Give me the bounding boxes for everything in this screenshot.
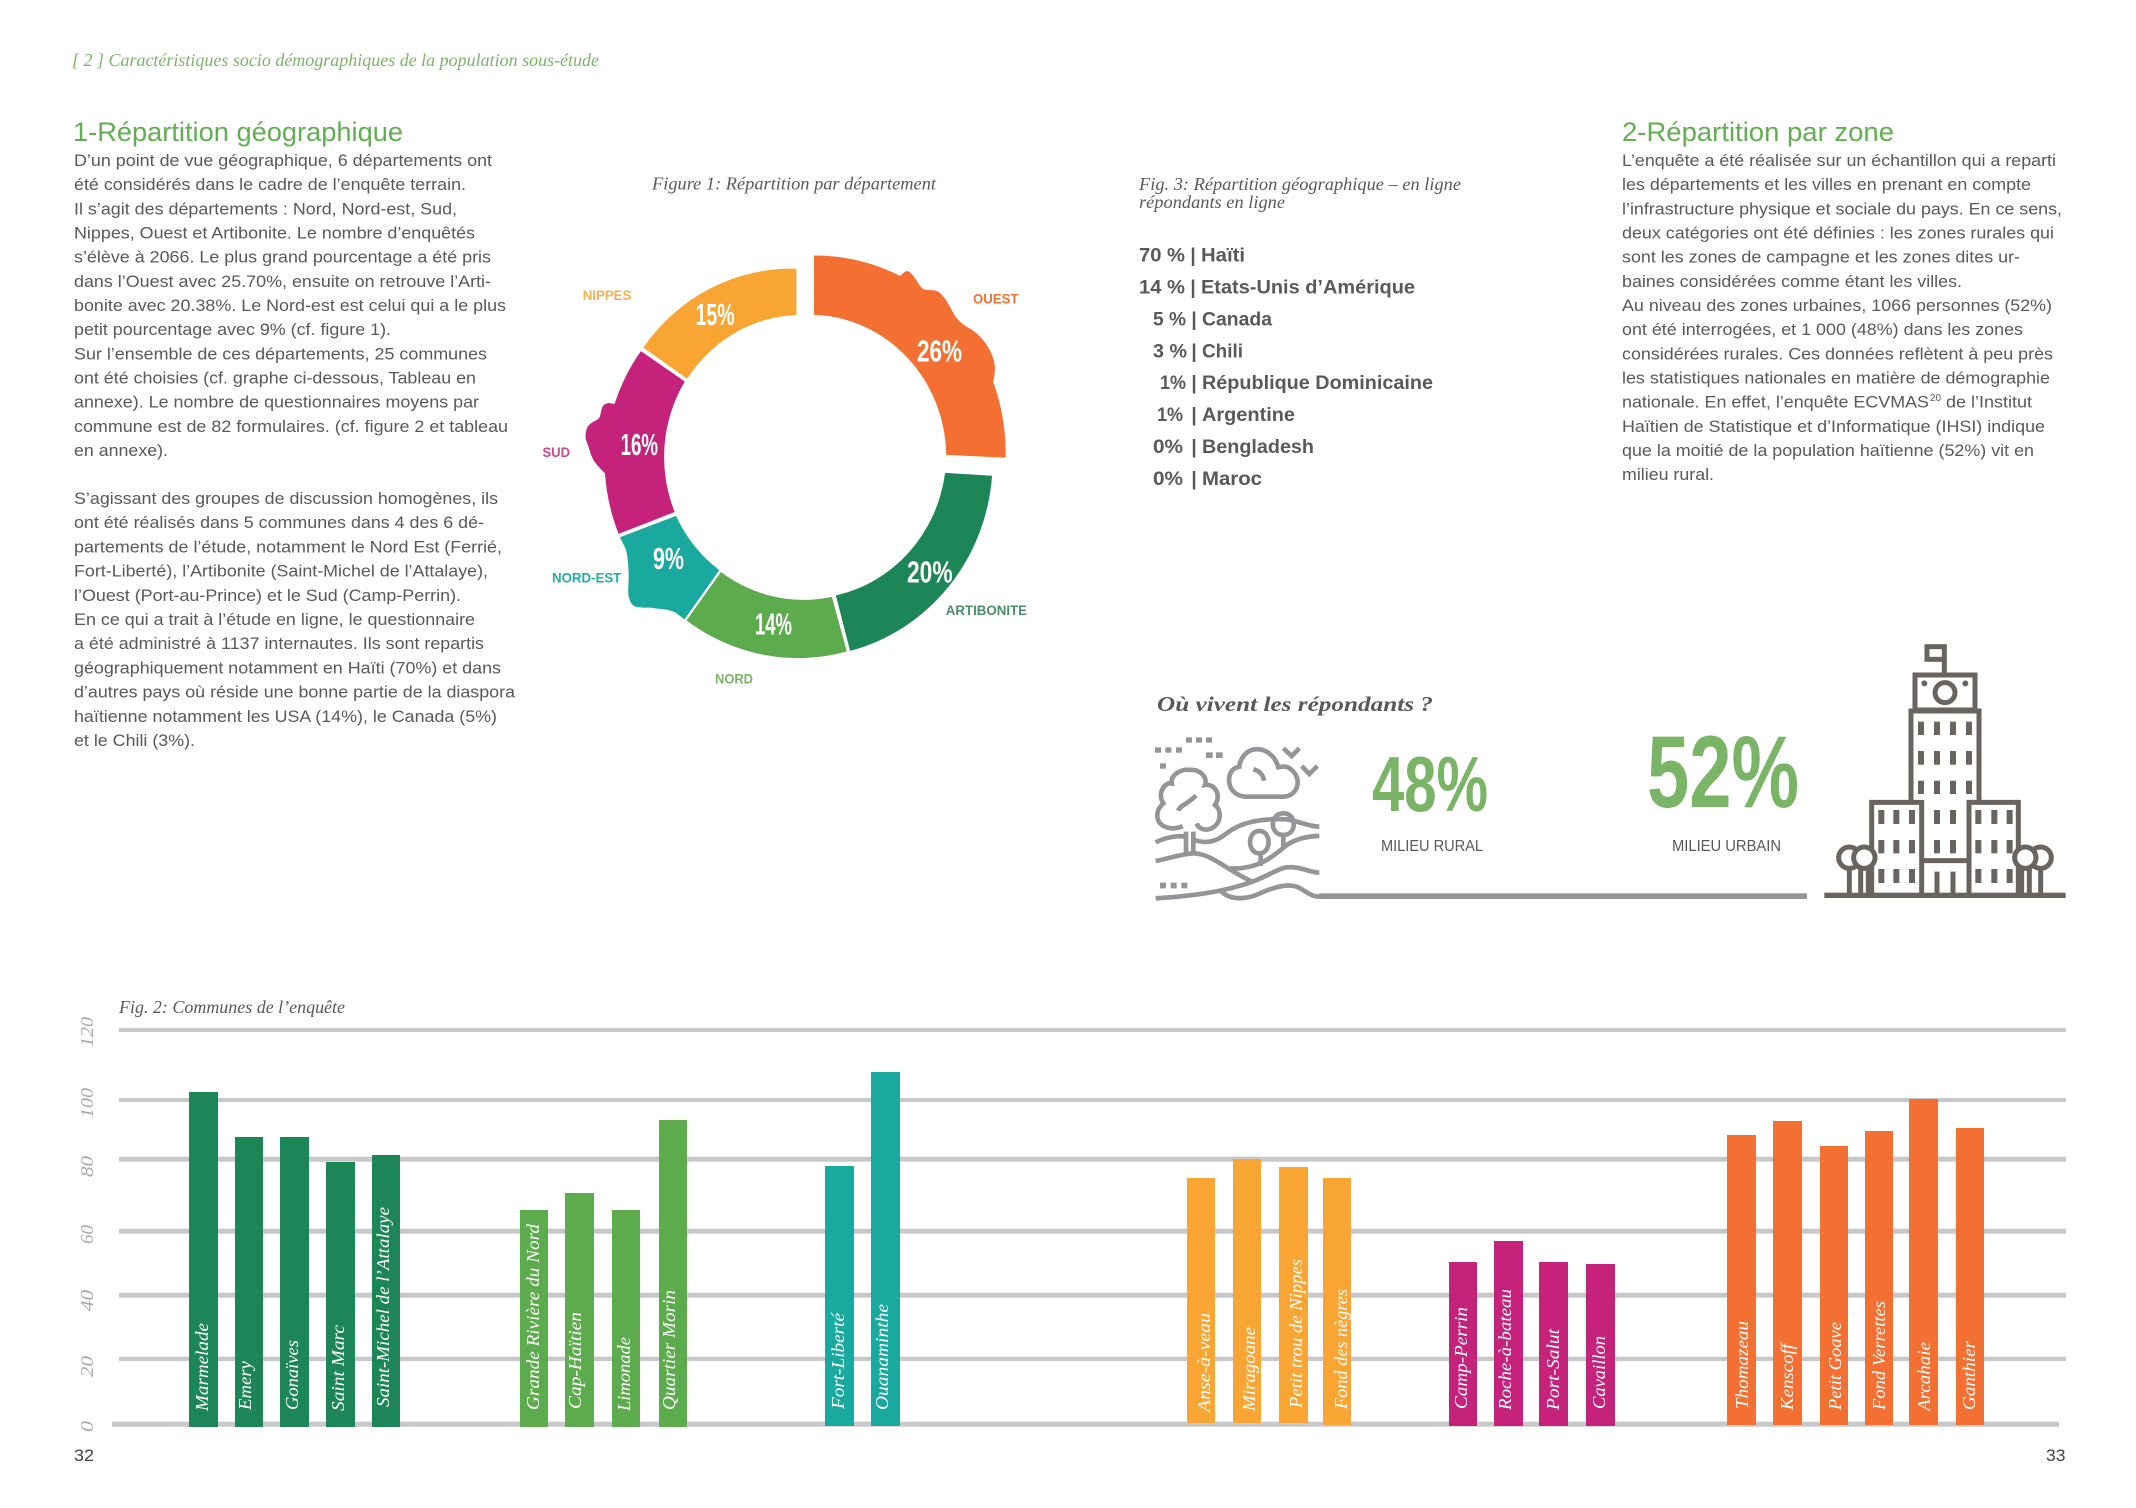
row: Chili: Chili	[1202, 342, 1243, 363]
y axis grid lines and values: 80	[77, 1156, 97, 1177]
y axis grid lines and values: 40	[77, 1290, 97, 1311]
bar: Thomazeau: Thomazeau	[1732, 1321, 1752, 1409]
text block: répartition géographique, second paragraph: et le Chili (3%).	[74, 731, 195, 750]
y axis grid lines and values: 20	[77, 1356, 97, 1377]
text block: répartition géographique, first paragraph: dans l’Ouest avec 25.70%, ensuite on retrouve l’Arti-	[74, 272, 491, 291]
bar: Gonaïves: Gonaïves	[282, 1340, 302, 1410]
bar: Quartier Morin: Quartier Morin	[659, 1290, 679, 1410]
bar: Marmelade	[189, 1092, 218, 1427]
icon: rural landscape	[1155, 737, 1319, 898]
bar: Cap-Haïtien	[565, 1193, 594, 1427]
text block: répartition géographique, first paragraph: annexe). Le nombre de questionnaires moyens par	[74, 393, 480, 412]
bar: Emery: Emery	[235, 1361, 255, 1411]
slice: Nippes 15%	[643, 269, 796, 379]
text block: répartition géographique, first paragraph: s’élève à 2066. Le plus grand pourcentage a été pris	[74, 248, 491, 267]
bar: Emery	[235, 1137, 263, 1427]
row: Haïti: |	[1190, 246, 1196, 267]
bar: Gonaïves	[280, 1137, 309, 1427]
group: Nord bars	[520, 1120, 687, 1427]
bar: Petit Goave: Petit Goave	[1825, 1322, 1845, 1411]
row: Etats-Unis: Etats-Unis d’Amérique	[1201, 278, 1415, 299]
bar: Limonade	[612, 1210, 640, 1427]
bar: Saint-Michel de l'Attalaye	[372, 1155, 400, 1427]
bar: Ganthier: Ganthier	[1959, 1340, 1979, 1410]
text block: répartition géographique, second paragraph: S’agissant des groupes de discussion homogènes, ils	[74, 489, 498, 508]
text block: répartition par zone: nationale. En effet, l’enquête ECVMAS	[1622, 393, 1929, 412]
bar: Fort-Liberté: Fort-Liberté	[828, 1312, 848, 1410]
y axis grid lines and values: 0	[77, 1421, 97, 1432]
label: Nippes: NIPPES	[583, 288, 631, 303]
bar: Petit Goave	[1820, 1146, 1848, 1425]
value: 15%: 15%	[696, 299, 735, 332]
text block: répartition géographique, first paragraph: Sur l’ensemble de ces départements, 25 communes	[74, 344, 487, 363]
bar: Ouanaminthe	[871, 1072, 900, 1426]
label: Sud: SUD	[542, 445, 570, 460]
row: République Dominicaine: 1%	[1160, 373, 1186, 394]
row: Etats-Unis: |	[1190, 278, 1196, 299]
bar: Fond des nègres: Fond des nègres	[1331, 1289, 1351, 1410]
page number 33: 33	[2046, 1446, 2066, 1465]
row: Canada	[1153, 310, 1272, 331]
bar: Saint-Michel de l'Attalaye: Saint-Michel de l’Attalaye	[373, 1207, 393, 1407]
text block: répartition par zone: baines considérées comme étant les villes.	[1622, 272, 1962, 291]
text block: répartition par zone: les statistiques nationales en matière de démographie	[1622, 368, 2050, 388]
row: République Dominicaine: |	[1191, 373, 1197, 394]
bar: Anse-à-veau: Anse-à-veau	[1194, 1313, 1214, 1413]
row: Argentine: 1%	[1157, 405, 1183, 426]
text block: répartition géographique, first paragraph: D’un point de vue géographique, 6 départements ont	[74, 151, 492, 170]
text block: répartition géographique, second paragraph: haïtienne notamment les USA (14%), le Canada (5%)	[74, 707, 497, 726]
bar: Petit trou de Nippes: Petit trou de Nippes	[1286, 1259, 1306, 1409]
subheading: où vivent les répondants: Où vivent les répondants ?	[1157, 692, 1433, 716]
bar: Cavaillon: Cavaillon	[1589, 1336, 1609, 1409]
group: Nord-Est bars	[825, 1072, 900, 1426]
group: Sud bars	[1449, 1241, 1615, 1426]
bar: Port-Salut	[1539, 1262, 1568, 1426]
stat: 48% milieu rural: 48%	[1372, 740, 1488, 828]
text block: répartition par zone: l’infrastructure physique et sociale du pays. En ce sens,	[1622, 199, 2062, 218]
text block: répartition géographique, first paragraph: été considérés dans le cadre de l’enquête terrain.	[74, 175, 466, 194]
bar: Fond Verrettes	[1865, 1131, 1893, 1425]
figure 3 title	[1138, 174, 1461, 212]
text block: répartition géographique, first paragraph: ont été choisies (cf. graphe ci-dessous, Tableau en	[74, 368, 476, 388]
text block: répartition par zone: ont été interrogées, et 1 000 (48%) dans les zones	[1622, 320, 2023, 339]
group: Artibonite bars	[189, 1092, 400, 1427]
bar: Camp-Perrin	[1449, 1262, 1477, 1426]
group: Ouest bars	[1727, 1099, 1984, 1425]
text block: répartition géographique, second paragraph: l’Ouest (Port-au-Prince) et le Sud (Camp-Perrin).	[74, 586, 461, 605]
text block: répartition par zone: milieu rural.	[1622, 465, 1714, 484]
bar: Quartier Morin	[659, 1120, 687, 1427]
bar chart: communes de l'enquête	[77, 1017, 2066, 1432]
label: Artibonite: ARTIBONITE	[946, 603, 1027, 618]
text block: répartition géographique, first paragraph: Il s’agit des départements : Nord, Nord-est, Sud,	[74, 199, 457, 218]
list: répartition géographique en ligne	[1139, 246, 1433, 490]
row: Haïti	[1139, 246, 1245, 267]
text block: répartition par zone: de l’Institut	[1946, 393, 2032, 412]
stat: 48% milieu rural: MILIEU RURAL	[1381, 838, 1483, 855]
text block: répartition par zone: les départements et les villes en prenant en compte	[1622, 175, 2031, 194]
text block: répartition géographique, first paragraph: Nippes, Ouest et Artibonite. Le nombre d’enquêtés	[74, 224, 475, 242]
row: Maroc: 0%	[1153, 469, 1183, 490]
text block: répartition géographique, second paragraph	[74, 489, 516, 750]
page section title: [ 2 ] Caractéristiques socio démographiques de la population sous-étude	[72, 50, 599, 70]
row: Etats-Unis: 14 %	[1139, 278, 1185, 299]
row: Bengladesh: |	[1191, 437, 1197, 458]
text block: répartition par zone	[1622, 151, 2062, 484]
row: Argentine: |	[1191, 405, 1197, 426]
text block: répartition par zone: deux catégories ont été définies : les zones rurales qui	[1622, 224, 2054, 242]
stat: 52% milieu urbain	[1647, 715, 1799, 855]
bar: Thomazeau	[1727, 1135, 1756, 1425]
text block: répartition géographique, first paragraph: commune est de 82 formulaires. (cf. figure 2 et tableau	[74, 417, 508, 436]
value: 16%: 16%	[621, 428, 658, 462]
row: Bengladesh: Bengladesh	[1202, 437, 1314, 458]
row: Chili	[1153, 342, 1243, 363]
text block: répartition par zone: 20	[1930, 393, 1941, 404]
text block: répartition géographique, second paragraph: d’autres pays où réside une bonne partie de la diaspora	[74, 683, 516, 702]
bar: Ouanaminthe: Ouanaminthe	[872, 1304, 892, 1410]
row: Haïti: 70 %	[1139, 246, 1185, 267]
donut chart: répartition par département	[542, 256, 1027, 686]
row: Chili: |	[1191, 342, 1197, 363]
row: Argentine: Argentine	[1202, 405, 1295, 426]
stat: 52% milieu urbain: MILIEU URBAIN	[1672, 838, 1781, 855]
row: Canada: 5 %	[1153, 310, 1186, 331]
bar: Fond des nègres	[1323, 1178, 1351, 1425]
y axis grid lines and values: 60	[77, 1225, 97, 1244]
figure 3 title: répondants en ligne	[1139, 192, 1285, 212]
heading: 1-Répartition géographique: 1-Répartition géographique	[73, 117, 403, 147]
value: 14%: 14%	[755, 608, 792, 642]
bar: Saint Marc	[326, 1162, 355, 1427]
text block: répartition géographique, first paragraph: petit pourcentage avec 9% (cf. figure 1).	[74, 320, 391, 339]
slice: Nord 14%	[686, 572, 847, 658]
bar: Cavaillon	[1586, 1264, 1615, 1426]
row: Maroc: |	[1191, 469, 1197, 490]
icon: city building	[1824, 647, 2066, 898]
text block: répartition géographique, second paragraph: partements de l’étude, notamment le Nord Est (Ferrié,	[74, 537, 502, 556]
bar: Ganthier	[1956, 1128, 1984, 1425]
bar: Cap-Haïtien: Cap-Haïtien	[565, 1312, 585, 1409]
row: Bengladesh	[1153, 437, 1314, 458]
text block: répartition par zone: sont les zones de campagne et les zones dites ur-	[1622, 248, 2020, 267]
heading: 2-Répartition par zone: 2-Répartition par zone	[1622, 117, 1894, 147]
value: 9%: 9%	[653, 543, 684, 576]
row: République Dominicaine: République Dominicaine	[1202, 373, 1433, 394]
group: Nippes bars	[1187, 1159, 1351, 1425]
y axis grid lines and values: 120	[77, 1017, 97, 1047]
y axis grid lines and values	[77, 1017, 2066, 1432]
slice: Sud 16%	[586, 351, 685, 534]
text block: répartition par zone: Au niveau des zones urbaines, 1066 personnes (52%)	[1622, 296, 2052, 315]
figure 1 title: Figure 1: Répartition par département	[651, 174, 937, 194]
row: Maroc: Maroc	[1202, 469, 1262, 490]
bar: Roche-à-bateau	[1494, 1241, 1523, 1426]
row: Bengladesh: 0%	[1153, 437, 1183, 458]
text block: répartition par zone: L’enquête a été réalisée sur un échantillon qui a reparti	[1622, 151, 2056, 170]
text block: répartition géographique, second paragraph: Fort-Liberté), l’Artibonite (Saint-Michel de l’Attalaye),	[74, 562, 488, 581]
slice: Nord-Est 9%	[620, 516, 719, 619]
value: 26%: 26%	[917, 335, 962, 369]
bar: Limonade: Limonade	[614, 1337, 634, 1412]
figure 2 title: Fig. 2: Communes de l’enquête	[118, 997, 345, 1017]
bar: Port-Salut: Port-Salut	[1543, 1328, 1563, 1411]
text block: répartition par zone: que la moitié de la population haïtienne (52%) vit en	[1622, 441, 2034, 460]
stat: 52% milieu urbain: 52%	[1647, 715, 1799, 829]
bar: Saint Marc: Saint Marc	[328, 1325, 348, 1411]
bar: Kenscoff	[1773, 1121, 1802, 1425]
slice: Artibonite 20%	[836, 473, 992, 651]
page number 32: 32	[74, 1446, 94, 1465]
text block: répartition géographique, first paragraph	[74, 151, 508, 460]
bar: Kenscoff: Kenscoff	[1777, 1341, 1797, 1411]
text block: répartition géographique, second paragraph: géographiquement notamment en Haïti (70%) et dans	[74, 658, 501, 677]
text block: répartition géographique, first paragraph: en annexe).	[74, 441, 168, 460]
stat: 48% milieu rural	[1372, 740, 1488, 855]
row: Canada: |	[1191, 310, 1197, 331]
y axis grid lines and values: 100	[77, 1088, 97, 1118]
bar: Fond Verrettes: Fond Verrettes	[1869, 1301, 1889, 1411]
bar: Fort-Liberté	[825, 1166, 854, 1426]
connecting ground line	[1319, 893, 1807, 899]
text block: répartition géographique, second paragraph: ont été réalisés dans 5 communes dans 4 des 6 dé-	[74, 513, 484, 532]
text block: répartition géographique, first paragraph: bonite avec 20.38%. Le Nord-est est celui qui a le plus	[74, 296, 506, 315]
text block: répartition géographique, second paragraph: a été administré à 1137 internautes. Ils sont repartis	[74, 634, 484, 653]
text block: répartition géographique, second paragraph: En ce qui a trait à l’étude en ligne, le questionnaire	[74, 610, 475, 629]
bar: Camp-Perrin: Camp-Perrin	[1451, 1307, 1471, 1409]
bar: Marmelade: Marmelade	[192, 1323, 212, 1412]
row: Maroc	[1153, 469, 1262, 490]
row: Chili: 3 %	[1153, 342, 1187, 363]
bar: Roche-à-bateau: Roche-à-bateau	[1495, 1289, 1515, 1411]
bar: Grande Rivière du Nord	[520, 1210, 548, 1427]
bar: Anse-à-veau	[1187, 1178, 1215, 1423]
label: Nord-Est: NORD-EST	[552, 570, 622, 586]
text block: répartition par zone: considérées rurales. Ces données reflètent à peu près	[1622, 344, 2053, 363]
row: Canada: Canada	[1202, 310, 1272, 331]
bar: Miragoane	[1233, 1159, 1261, 1423]
bar: Miragoane: Miragoane	[1239, 1327, 1259, 1412]
text block: répartition par zone: Haïtien de Statistique et d’Informatique (IHSI) indique	[1622, 417, 2045, 436]
value: 20%: 20%	[907, 556, 953, 590]
figure 3 title: Fig. 3: Répartition géographique – en ligne	[1138, 174, 1461, 194]
bar: Grande Rivière du Nord: Grande Rivière du Nord	[523, 1223, 543, 1410]
slice: Ouest 26%	[814, 256, 1006, 458]
row: Argentine	[1157, 405, 1295, 426]
label: Ouest: OUEST	[973, 291, 1019, 306]
label: Nord: NORD	[715, 671, 753, 686]
row: Haïti: Haïti	[1201, 246, 1245, 267]
bar: Petit trou de Nippes	[1279, 1167, 1308, 1423]
bar: Arcahaie: Arcahaie	[1914, 1342, 1934, 1412]
bar: Arcahaie	[1909, 1099, 1938, 1425]
